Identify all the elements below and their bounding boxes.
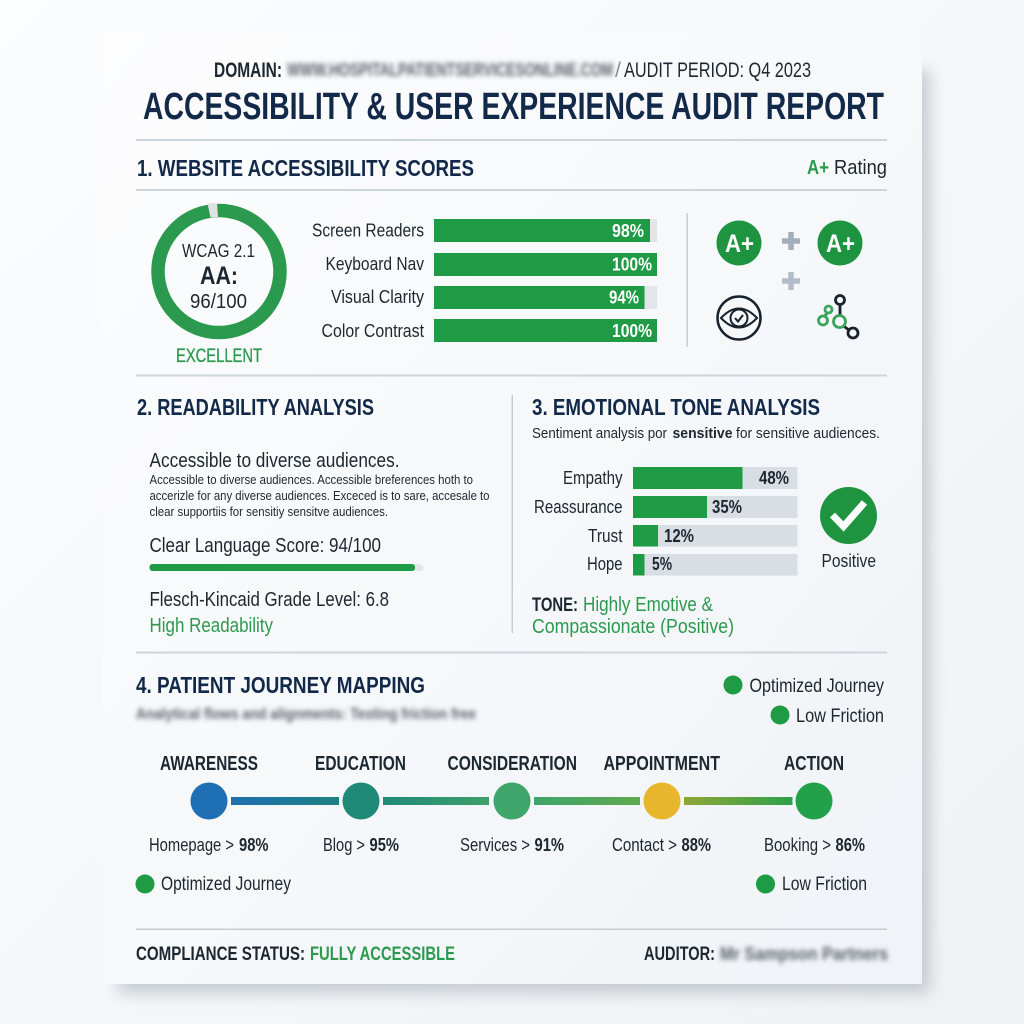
heading: section 1: 1. WEBSITE ACCESSIBILITY SCORES <box>137 155 474 181</box>
bar chart: tone: 5% <box>652 554 672 574</box>
panel: readability analysis <box>137 394 490 637</box>
bar chart: tone: Trust <box>588 526 622 546</box>
subtitle: for sensitive audiences. <box>736 425 880 442</box>
footer: auditor: AUDITOR: <box>644 943 715 965</box>
legend: top right <box>724 676 884 727</box>
bar chart: tone <box>534 467 798 576</box>
icon: plus <box>782 232 800 250</box>
donut chart: WCAG score: WCAG 2.1 <box>182 241 255 261</box>
icon: plus <box>782 272 800 290</box>
A+ rating label <box>807 157 887 179</box>
text block: readability summary: Accessible to diverse audiences. Accessible breferences hoth to <box>150 473 473 487</box>
domain and audit period line <box>214 59 811 82</box>
domain and audit period line: / <box>615 59 621 82</box>
footer: compliance status <box>136 943 455 965</box>
icon: A+ badge: A+ <box>725 230 754 258</box>
tone summary <box>532 594 734 638</box>
stage labels <box>160 753 844 775</box>
subtitle: sensitive <box>672 425 732 442</box>
bar chart: accessibility scores: 94% <box>609 288 639 308</box>
stage metrics <box>149 834 865 855</box>
bar chart: accessibility scores <box>312 219 657 342</box>
bar chart: tone: Reassurance <box>534 497 622 517</box>
stage metrics: Booking > <box>764 834 831 855</box>
heading: section 4: 4. PATIENT JOURNEY MAPPING <box>136 672 425 698</box>
clear language score meter: Clear Language Score: 94/100 <box>150 535 381 557</box>
panel: website accessibility scores <box>136 155 887 367</box>
bar chart: tone: 48% <box>759 468 789 488</box>
panel: emotional tone analysis <box>532 394 880 638</box>
text block: readability summary: accerizle for any diverse audiences. Exceced is to sare, accesale to <box>150 489 490 503</box>
heading: section 2: 2. READABILITY ANALYSIS <box>137 394 374 420</box>
legend: top right: Low Friction <box>796 706 884 727</box>
domain and audit period line: DOMAIN: <box>214 59 282 82</box>
grade level: Flesch-Kincaid Grade Level: 6.8 <box>150 589 389 611</box>
A+ rating label: A+ <box>807 157 829 179</box>
blurred subtitle: Analytical flows and alignments: Testing friction free <box>136 706 476 723</box>
grade level: High Readability <box>150 615 273 637</box>
legend: bottom right: Low Friction <box>782 874 867 895</box>
icon: A+ badge: A+ <box>826 230 855 258</box>
legend: bottom left: Optimized Journey <box>161 874 291 895</box>
bar chart: tone: Empathy <box>563 468 622 488</box>
bar chart: tone: 35% <box>712 497 742 517</box>
stage metrics: Services > <box>460 834 530 855</box>
bar chart: accessibility scores: 100% <box>612 254 652 274</box>
bar chart: accessibility scores: Color Contrast <box>322 321 424 341</box>
bar chart: tone: 12% <box>664 526 694 546</box>
heading: section 3: 3. EMOTIONAL TONE ANALYSIS <box>532 394 820 420</box>
legend: top right: Optimized Journey <box>750 676 884 697</box>
text block: readability summary <box>150 450 490 519</box>
donut chart: WCAG score: EXCELLENT <box>176 346 262 367</box>
bar chart: accessibility scores: 100% <box>612 321 652 341</box>
donut chart: WCAG score: AA: <box>200 262 238 290</box>
domain and audit period line: AUDIT PERIOD: Q4 2023 <box>624 59 811 82</box>
donut chart: WCAG score <box>158 203 280 367</box>
stage metrics: 86% <box>836 834 865 855</box>
icon: positive check <box>820 487 877 571</box>
text block: readability summary: Accessible to diverse audiences. <box>150 450 400 472</box>
report header <box>143 59 884 128</box>
stage labels: AWARENESS <box>160 753 258 775</box>
icon: positive check: Positive <box>822 551 876 571</box>
icon: eye with check <box>718 296 760 340</box>
domain and audit period line: WWW.HOSPITALPATIENTSERVICESONLINE.COM <box>287 60 613 80</box>
stage metrics: Homepage > <box>149 834 234 855</box>
stage labels: EDUCATION <box>315 753 406 775</box>
icon: A+ badge <box>716 220 762 266</box>
stage metrics: 91% <box>534 834 564 855</box>
bar chart: accessibility scores: Keyboard Nav <box>326 254 424 274</box>
bar chart: accessibility scores: Screen Readers <box>312 220 424 240</box>
footer: compliance status: FULLY ACCESSIBLE <box>310 943 455 965</box>
stage labels: CONSIDERATION <box>448 753 577 775</box>
bar chart: accessibility scores: Visual Clarity <box>331 287 424 307</box>
stage metrics: 98% <box>239 834 268 855</box>
stage metrics: 95% <box>370 834 399 855</box>
footer: auditor: Mr Sampson Partners <box>720 944 888 964</box>
panel: patient journey mapping <box>136 672 884 895</box>
tone summary: Compassionate (Positive) <box>532 616 734 638</box>
stage labels: APPOINTMENT <box>604 753 720 775</box>
A+ rating label: Rating <box>834 157 887 179</box>
icon: connected nodes <box>818 296 858 338</box>
tone summary: Highly Emotive & <box>583 594 714 616</box>
donut chart: WCAG score: 96/100 <box>190 291 247 313</box>
text block: readability summary: clear supportiis for sensitiy sensitve audiences. <box>150 505 388 519</box>
grade level <box>150 589 389 637</box>
stage metrics: Blog > <box>323 834 365 855</box>
bar chart: tone: Hope <box>587 554 622 574</box>
icon: A+ badge <box>818 220 862 266</box>
footer: auditor <box>644 943 888 965</box>
clear language score meter <box>150 535 424 571</box>
journey timeline <box>190 782 832 820</box>
stage metrics: 88% <box>682 834 711 855</box>
stage labels: ACTION <box>784 753 844 775</box>
stage metrics: Contact > <box>612 834 677 855</box>
bar chart: accessibility scores: 98% <box>612 221 644 241</box>
tone summary: TONE: <box>532 595 578 616</box>
legend: bottom right <box>756 874 867 895</box>
footer: compliance status: COMPLIANCE STATUS: <box>136 943 305 965</box>
subtitle <box>532 425 880 442</box>
subtitle: Sentiment analysis por <box>532 425 667 442</box>
